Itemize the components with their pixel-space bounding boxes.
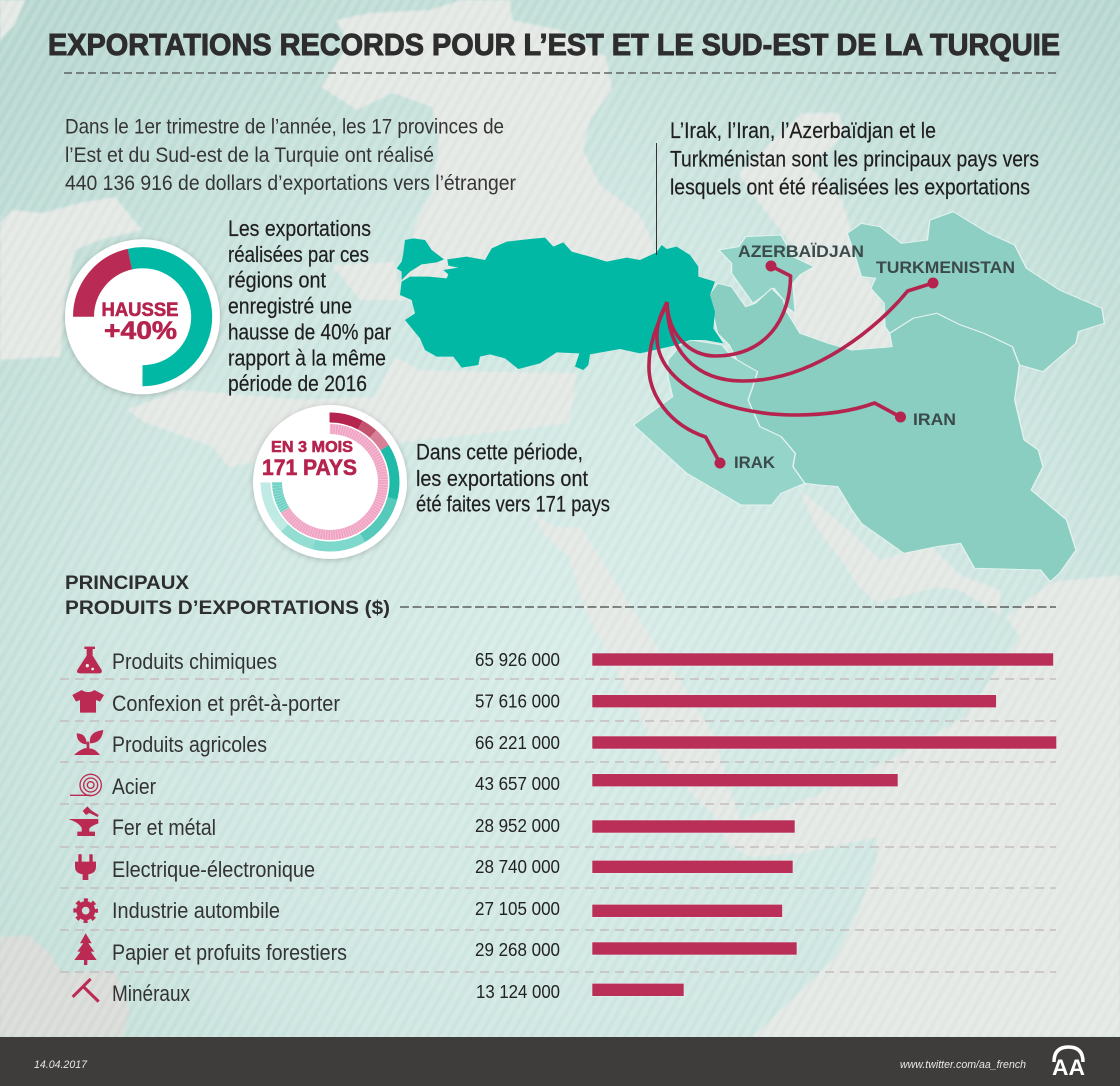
neighbouring countries — [633, 212, 1104, 582]
section heading: principal exports: PRODUITS D’EXPORTATIONS ($) — [65, 598, 390, 619]
Turkey — [397, 238, 723, 370]
logo: Anadolu Agency: AA — [1052, 1055, 1085, 1080]
footer bar: 14.04.2017 — [34, 1059, 88, 1071]
export routes — [649, 266, 933, 463]
icon: anvil and hammer — [68, 806, 99, 836]
product labels: Fer et métal — [112, 815, 216, 840]
icon: t-shirt — [72, 690, 104, 713]
footer bar: www.twitter.com/aa_french — [900, 1059, 1026, 1071]
text: 171 pays: Dans cette période, — [416, 440, 583, 464]
icon: fir tree — [74, 933, 97, 965]
bar chart — [592, 653, 1057, 996]
product values: 27 105 000 — [475, 899, 560, 919]
icon: flask — [77, 647, 102, 673]
icon: steel coil — [70, 774, 101, 796]
product labels — [112, 649, 347, 1006]
icon: pickaxe — [73, 979, 99, 1002]
product labels: Produits chimiques — [112, 649, 277, 674]
product labels: Confexion et prêt-à-porter — [112, 691, 340, 716]
product values: 13 124 000 — [476, 982, 560, 1002]
icon: plant — [74, 730, 103, 755]
text: 171 pays — [416, 440, 610, 516]
icon: electric plug — [75, 854, 96, 880]
product labels: Minéraux — [112, 981, 190, 1006]
intro text: l’Est et du Sud-est de la Turquie ont réalisé — [65, 143, 434, 167]
title: EXPORTATIONS RECORDS POUR L’EST ET LE SUD-EST DE LA TURQUIE — [48, 28, 1060, 62]
country labels: IRAN — [913, 410, 956, 429]
text: hausse de 40%: régions ont — [228, 268, 326, 292]
route end dots — [714, 260, 938, 468]
donut: 171 pays en 3 mois — [253, 405, 407, 559]
donut: 171 pays en 3 mois: EN 3 MOIS — [271, 439, 353, 456]
country labels: IRAK — [734, 453, 776, 472]
intro text — [65, 114, 516, 195]
product values: 43 657 000 — [475, 774, 560, 794]
product values: 57 616 000 — [475, 692, 560, 712]
intro text: Dans le 1er trimestre de l’année, les 17 provinces de — [65, 114, 504, 138]
map: Turkey and partner countries — [397, 212, 1104, 582]
product values: 28 740 000 — [475, 857, 560, 877]
text: hausse de 40%: période de 2016 — [228, 371, 367, 396]
product icons — [68, 647, 104, 1002]
country labels — [734, 242, 1015, 472]
donut: hausse +40%: +40% — [104, 317, 177, 345]
row dividers — [60, 679, 1056, 972]
product labels: Papier et profuits forestiers — [112, 940, 347, 965]
donut: hausse +40%: HAUSSE — [102, 300, 178, 321]
product values: 65 926 000 — [475, 650, 560, 670]
main partner countries text — [670, 118, 1039, 200]
product values: 29 268 000 — [475, 940, 560, 960]
icon: gear — [75, 900, 96, 921]
country labels: AZERBAÏDJAN — [738, 242, 864, 261]
donut: 171 pays en 3 mois: 171 PAYS — [262, 455, 357, 480]
text: hausse de 40%: hausse de 40% par — [228, 320, 391, 344]
footer bar — [0, 1037, 1120, 1086]
leader line — [656, 143, 658, 255]
text: hausse de 40%: réalisées par ces — [228, 242, 369, 267]
inner striped ring — [277, 429, 383, 535]
text: hausse de 40% — [228, 216, 391, 396]
product values — [475, 650, 560, 1002]
product labels: Industrie autombile — [112, 898, 280, 923]
donut: hausse +40% — [65, 239, 220, 394]
text: hausse de 40%: enregistré une — [228, 294, 352, 318]
product labels: Produits agricoles — [112, 732, 267, 757]
intro text: 440 136 916 de dollars d’exportations vers l’étranger — [65, 171, 516, 195]
text: 171 pays: été faites vers 171 pays — [416, 492, 610, 516]
product labels: Electrique-électronique — [112, 857, 315, 882]
country labels: TURKMENISTAN — [876, 258, 1015, 277]
product labels: Acier — [112, 774, 156, 799]
text: 171 pays: les exportations ont — [416, 466, 588, 491]
outer ring segments — [266, 418, 394, 546]
main partner countries text: L’Irak, l’Iran, l’Azerbaïdjan et le — [670, 118, 936, 143]
product values: 66 221 000 — [475, 733, 560, 753]
section heading: principal exports — [65, 573, 1056, 619]
text: hausse de 40%: Les exportations — [228, 216, 371, 241]
product values: 28 952 000 — [475, 816, 560, 836]
main partner countries text: lesquels ont été réalisées les exportations — [670, 174, 1030, 200]
text: hausse de 40%: rapport à la même — [228, 346, 386, 370]
main partner countries text: Turkménistan sont les principaux pays vers — [670, 146, 1039, 172]
section heading: principal exports: PRINCIPAUX — [65, 573, 189, 594]
